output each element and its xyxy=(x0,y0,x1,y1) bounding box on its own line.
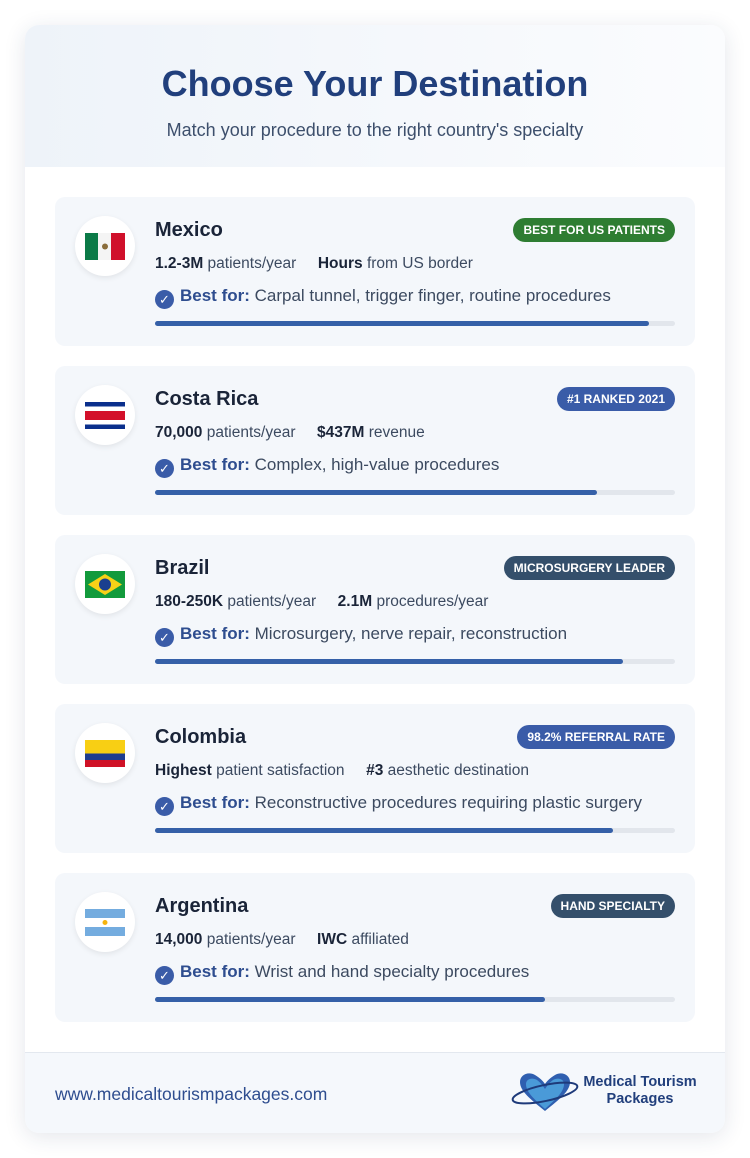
best for: ✓ xyxy=(159,292,170,307)
icon: Colombia flag xyxy=(75,723,135,783)
badge xyxy=(551,894,675,918)
panel: Argentina xyxy=(55,873,695,1022)
panel: Colombia xyxy=(55,704,695,853)
progress bar xyxy=(155,490,675,495)
badge: #1 RANKED 2021 xyxy=(567,392,665,406)
badge xyxy=(517,725,675,749)
badge xyxy=(504,556,675,580)
panel: Costa Rica xyxy=(55,366,695,515)
stats: Highest patient satisfaction #3 aesthetic destination xyxy=(155,762,529,779)
badge xyxy=(557,387,675,411)
badge xyxy=(513,218,675,242)
logo: Packages xyxy=(607,1091,673,1107)
icon: Costa Rica flag xyxy=(75,385,135,445)
best for: Best for: Complex, high-value procedures xyxy=(180,455,499,474)
stats: 14,000 patients/year IWC affiliated xyxy=(155,931,409,948)
best for: ✓ xyxy=(159,461,170,476)
icon: Brazil flag xyxy=(75,554,135,614)
name: Costa Rica xyxy=(155,388,258,410)
subtitle: Match your procedure to the right country's specialty xyxy=(167,120,583,140)
name: Colombia xyxy=(155,726,246,748)
logo xyxy=(512,1073,697,1111)
name: Argentina xyxy=(155,895,248,917)
stats: 180-250K patients/year 2.1M procedures/year xyxy=(155,593,488,610)
best for: ✓ xyxy=(159,799,170,814)
logo: Medical Tourism xyxy=(583,1074,697,1090)
panel: Brazil xyxy=(55,535,695,684)
badge: HAND SPECIALTY xyxy=(561,899,665,913)
badge: BEST FOR US PATIENTS xyxy=(523,223,665,237)
best for: Best for: Microsurgery, nerve repair, reconstruction xyxy=(180,624,567,643)
title: Choose Your Destination xyxy=(162,63,588,104)
stats: 70,000 patients/year $437M revenue xyxy=(155,424,425,441)
progress bar xyxy=(155,828,675,833)
best for: Best for: Reconstructive procedures requiring plastic surgery xyxy=(180,793,642,812)
progress bar xyxy=(155,997,675,1002)
icon: Argentina flag xyxy=(75,892,135,952)
badge: MICROSURGERY LEADER xyxy=(514,561,665,575)
progress bar xyxy=(155,659,675,664)
name: Mexico xyxy=(155,219,223,241)
icon: Mexico flag xyxy=(75,216,135,276)
panel: Mexico xyxy=(55,197,695,346)
best for: ✓ xyxy=(159,968,170,983)
stats: 1.2-3M patients/year Hours from US border xyxy=(155,255,473,272)
progress bar xyxy=(155,321,675,326)
website url: www.medicaltourismpackages.com xyxy=(55,1084,327,1104)
best for: ✓ xyxy=(159,630,170,645)
best for: Best for: Carpal tunnel, trigger finger, routine procedures xyxy=(180,286,611,305)
best for: Best for: Wrist and hand specialty procedures xyxy=(180,962,529,981)
header xyxy=(25,25,725,167)
badge: 98.2% REFERRAL RATE xyxy=(527,730,665,744)
name: Brazil xyxy=(155,557,209,579)
footer xyxy=(25,1052,725,1133)
